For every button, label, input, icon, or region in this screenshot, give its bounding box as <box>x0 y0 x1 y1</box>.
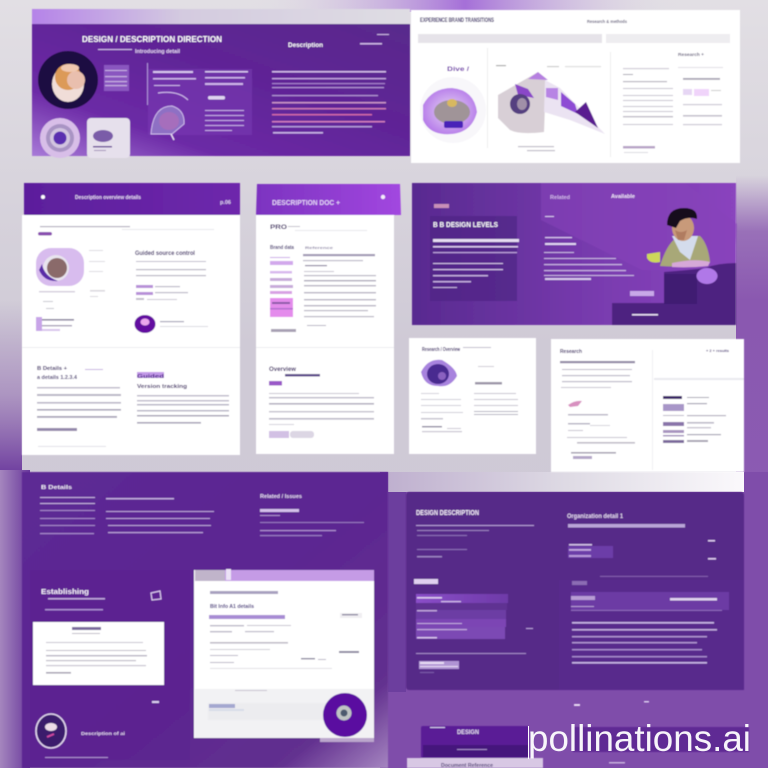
icon: food plate <box>38 51 98 109</box>
panel: right white card with table: Research <box>560 349 582 355</box>
panel: middle white page <box>256 184 401 454</box>
header text: DESCRIPTION DOC + <box>272 200 340 207</box>
icon: violet ring <box>134 315 208 333</box>
text block <box>272 71 386 134</box>
text block left <box>414 525 534 584</box>
upper right boxes <box>568 540 716 585</box>
panel: lower right purple spread: Organization detail 1 <box>567 514 624 520</box>
panel: top right white report: Research & methods <box>587 19 627 24</box>
panel: middle white page: PRO <box>270 225 287 231</box>
stacked bars <box>416 594 533 654</box>
subheading: Establishing <box>41 589 89 596</box>
heading: B B DESIGN LEVELS <box>433 220 498 229</box>
icon: mini chip <box>151 591 161 600</box>
panel: lower left purple spread: Related / Issues <box>260 494 302 500</box>
small marks below panel <box>574 701 649 706</box>
emblem label: Description of ai <box>81 731 125 736</box>
header text: Description overview details <box>75 195 141 201</box>
icon: purple blob <box>420 77 486 143</box>
text column: Research + <box>678 52 704 57</box>
icon: purple medallion <box>323 693 367 737</box>
text block right <box>572 622 717 664</box>
highlighted band <box>571 592 729 611</box>
lower text columns: Guided <box>137 374 164 380</box>
icon: pie wedge <box>151 106 184 140</box>
panel: lower left purple spread <box>22 472 388 768</box>
3D chart shape <box>496 65 605 151</box>
lower text columns: a details 1.2.3.4 <box>37 375 77 381</box>
lower text columns: Version tracking <box>137 384 187 390</box>
panel: middle white page: Reference <box>305 245 334 250</box>
icon: round dish <box>40 118 80 158</box>
panel: lower right purple spread <box>406 492 744 690</box>
panel: right white card with table <box>551 339 744 472</box>
panel: middle white page: Brand data <box>270 245 294 251</box>
panel: purple banner with portrait: Available <box>611 194 635 200</box>
icon: lilac blob with dish <box>36 232 84 309</box>
side swatches <box>270 257 296 332</box>
panel: top left purple banner <box>32 9 410 158</box>
card: large white document: Bit Info A1 details <box>210 604 254 610</box>
panel: small white card with icon: Research / Overview <box>422 347 460 353</box>
icon card <box>87 118 130 158</box>
panel: right white card with table: + 2 + results <box>706 349 729 353</box>
top labels: Related <box>550 195 570 201</box>
headings: B Details <box>41 485 72 491</box>
lower text block <box>269 367 374 438</box>
text column <box>623 52 723 153</box>
heading: DESIGN DESCRIPTION <box>416 510 479 517</box>
chart box 1 <box>104 65 129 91</box>
mini table <box>683 78 722 125</box>
mini table rows <box>663 396 726 443</box>
text lines <box>136 261 206 300</box>
label: column heading: Description <box>288 43 323 49</box>
lower text block: Overview <box>269 367 296 373</box>
icon: purple stone <box>421 360 457 386</box>
subheading: Guided source control <box>135 251 195 257</box>
middle text <box>544 216 658 316</box>
small label: Dive / <box>447 67 469 73</box>
chart box 2 <box>147 63 252 135</box>
illustration: person <box>647 208 736 304</box>
card: small white note <box>33 622 164 685</box>
bottom mini banners <box>407 726 749 768</box>
lower text columns: B Details + <box>37 366 67 372</box>
watermark: pollinations.ai <box>528 718 751 759</box>
body text <box>303 254 376 326</box>
text: upper left <box>40 497 364 536</box>
subheading: Introducing detail <box>135 49 181 55</box>
icon: pink smear <box>568 401 582 407</box>
legend bars <box>36 317 74 331</box>
card: large white document <box>194 569 374 742</box>
panel: left white page: p.06 <box>220 200 231 206</box>
title: EXPERIENCE BRAND TRANSITIONS <box>420 18 494 24</box>
panel: small white card with icon <box>409 338 536 454</box>
badge <box>434 204 449 208</box>
panel: top right white report <box>411 10 740 163</box>
lower text columns <box>37 366 229 447</box>
icon: circular emblem <box>36 714 66 748</box>
heading: DESIGN / DESCRIPTION DIRECTION <box>82 34 222 44</box>
panel: purple banner with portrait <box>412 183 737 325</box>
left text <box>433 239 519 288</box>
bottom mini banners: DESIGN <box>457 730 479 736</box>
panel: left white page <box>22 183 240 455</box>
callout box <box>419 661 459 673</box>
